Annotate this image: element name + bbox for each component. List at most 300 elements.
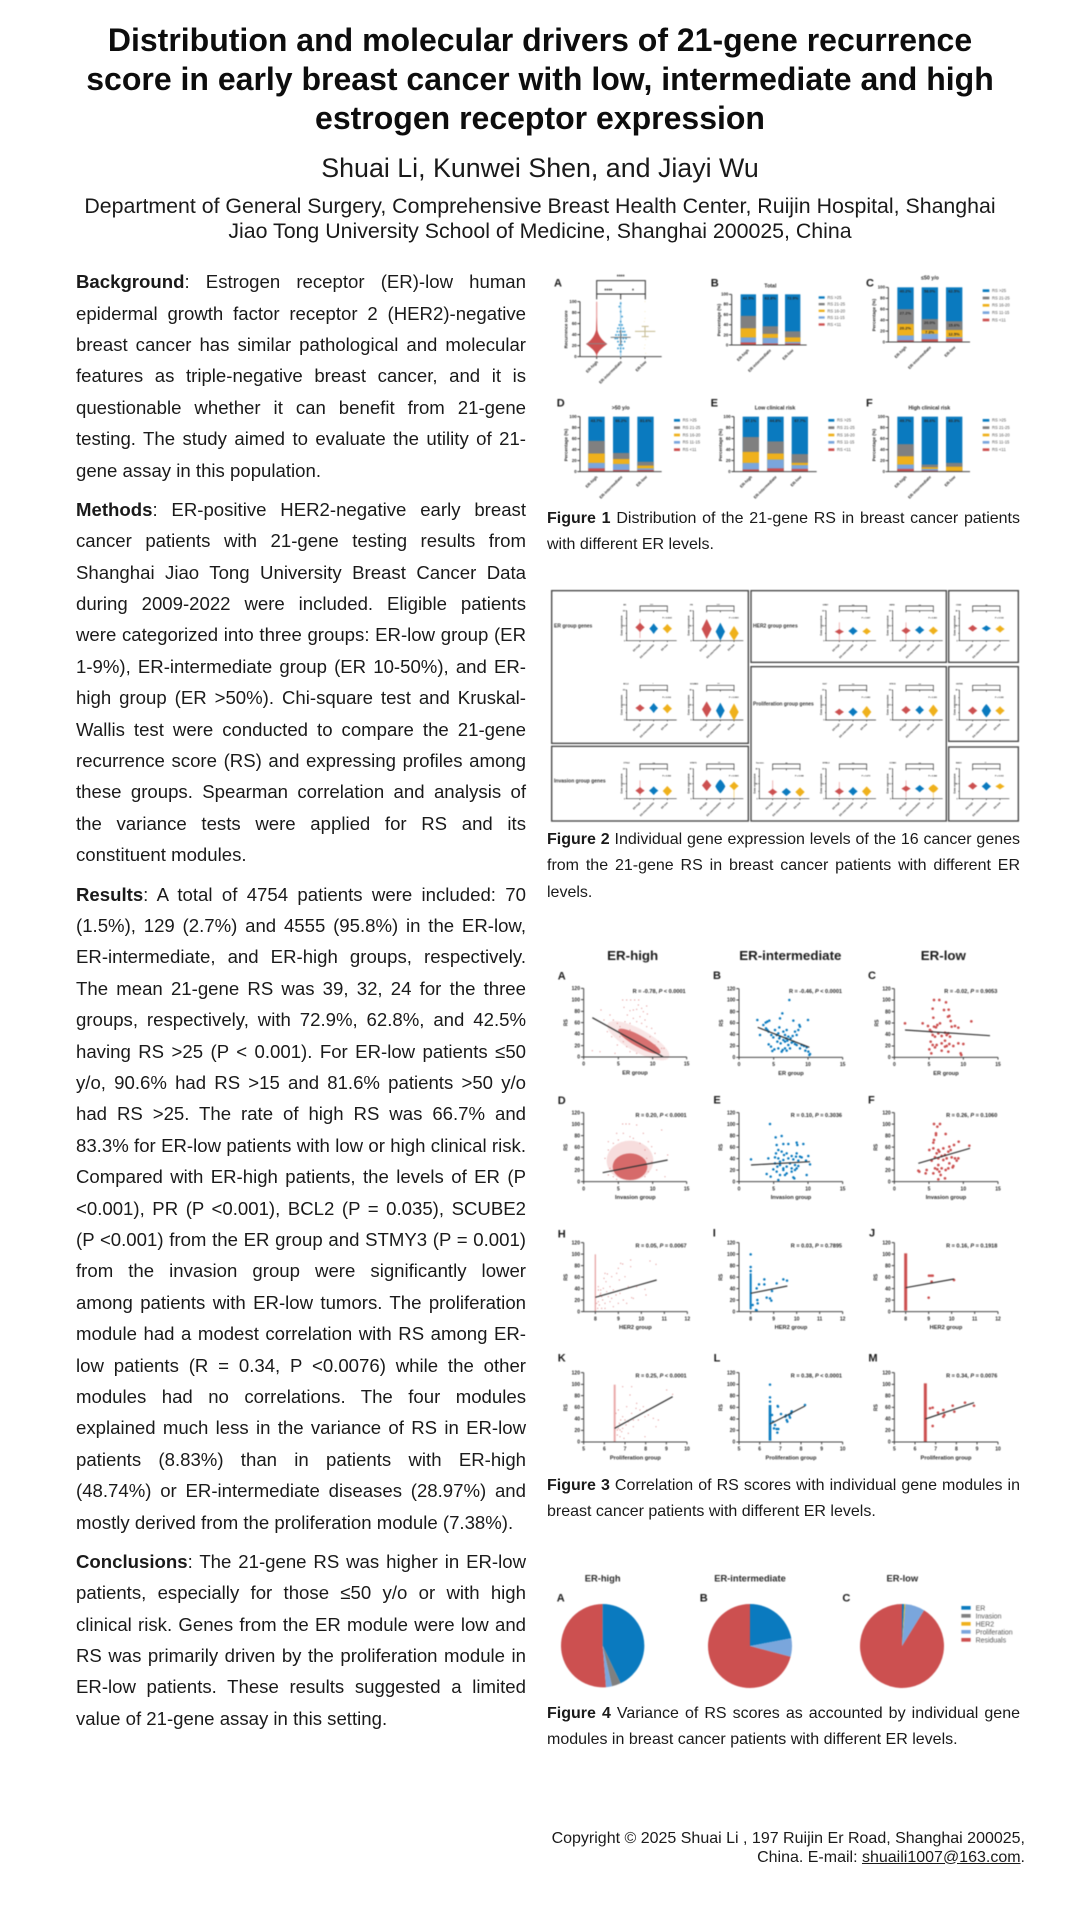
chart B: total stacked bars: 0 bbox=[726, 342, 729, 347]
violin plot: PR bbox=[687, 604, 743, 659]
violin plot: CD68: ns bbox=[985, 604, 989, 606]
scatter L: 60 bbox=[730, 1405, 736, 1411]
scatter H: 9 bbox=[617, 1316, 620, 1322]
scatter K bbox=[558, 1353, 690, 1461]
violin plot: HER2: Gene expression bbox=[887, 615, 890, 636]
chart B: total stacked bars: RS 21-25 bbox=[827, 302, 846, 307]
chart B: total stacked bars: Percentage (%) bbox=[716, 303, 721, 336]
text block: methods: constituent modules. bbox=[76, 844, 247, 865]
chart C: age 50 or younger stacked bars: 80 bbox=[880, 295, 886, 300]
text block: results: groups, respectively, with 72.9%, 62.8%, and 42.5% bbox=[76, 1009, 526, 1030]
chart D: age over 50 stacked bars: Percentage (%) bbox=[563, 428, 568, 461]
scatter E: RS bbox=[718, 1143, 724, 1151]
scatter E: 0 bbox=[738, 1186, 741, 1192]
violin plot: CD68: 20 bbox=[955, 610, 959, 612]
violin plot: STMY3: P < 0.0001 bbox=[729, 775, 740, 778]
text block: conclusions bbox=[76, 1551, 526, 1729]
chart F: high clinical risk stacked bars: 83.3% bbox=[948, 418, 960, 423]
chart D: age over 50 stacked bars: 20 bbox=[572, 458, 577, 463]
scatter H: 80 bbox=[574, 1263, 580, 1269]
text block: results: had RS >25. The rate of high RS was 66.7% and bbox=[76, 1103, 526, 1124]
scatter I: 8 bbox=[749, 1316, 752, 1322]
violin plot: CTSL2: ER-low bbox=[661, 802, 669, 810]
panel: BAG1 box bbox=[949, 747, 1018, 821]
chart A: recurrence score dot plot: A bbox=[554, 278, 562, 290]
violin plot: PR: Gene expression bbox=[687, 615, 690, 636]
violin plot: GSTM1 bbox=[953, 684, 1009, 739]
violin plot: HER2: ns bbox=[919, 604, 922, 606]
chart C: age 50 or younger stacked bars: 20.0% bbox=[924, 320, 936, 325]
caption: figure 3 bbox=[547, 1476, 1020, 1520]
violin plot: CD68: 10 bbox=[955, 625, 959, 627]
scatter J: 11 bbox=[972, 1316, 978, 1322]
chart A: recurrence score dot plot: ER-low bbox=[634, 359, 648, 373]
text block: background bbox=[76, 271, 526, 481]
scatter K: RS bbox=[563, 1404, 569, 1411]
chart B: total stacked bars: RS 11-15 bbox=[827, 315, 845, 320]
panel: invasion group genes box bbox=[552, 746, 748, 821]
text block: results: 83.3% for ER-low patients with low or high clinical risk. bbox=[76, 1135, 526, 1156]
scatter A: ER group bbox=[622, 1070, 648, 1076]
scatter C: 40 bbox=[885, 1032, 891, 1038]
chart D: age over 50 stacked bars bbox=[557, 398, 701, 500]
violin plot: STK15: ER-high bbox=[898, 723, 908, 732]
violin plot: SCUBE2: ER-high bbox=[699, 723, 708, 732]
caption: figure 1 bbox=[547, 510, 1020, 553]
chart A: recurrence score dot plot: ER-intermediate bbox=[598, 359, 624, 385]
chart B: total stacked bars: ER-intermediate bbox=[747, 347, 773, 373]
scatter A: 15 bbox=[684, 1062, 690, 1068]
chart E: low clinical risk stacked bars: 67.7% bbox=[794, 418, 806, 423]
violin plot: CD68: 0 bbox=[957, 640, 959, 642]
scatter F: 0 bbox=[893, 1186, 896, 1192]
violin plot: CCNB1 bbox=[887, 762, 943, 817]
scatter I: 10 bbox=[794, 1316, 800, 1322]
scatter D: 0 bbox=[577, 1179, 580, 1185]
chart B: total stacked bars: 80 bbox=[724, 302, 729, 307]
scatter F: 80 bbox=[885, 1133, 891, 1139]
chart C: age 50 or younger stacked bars: 12.5% bbox=[948, 331, 960, 336]
chart C: age 50 or younger stacked bars: 27.2% bbox=[900, 310, 911, 315]
chart F: high clinical risk stacked bars: RS <11 bbox=[992, 447, 1006, 452]
violin plot: STMY3: 20 bbox=[689, 768, 693, 770]
scatter K: 40 bbox=[574, 1417, 580, 1423]
chart C: age 50 or younger stacked bars: 0 bbox=[883, 339, 886, 344]
violin plot: STMY3: 0 bbox=[691, 798, 693, 800]
scatter L: 9 bbox=[820, 1447, 823, 1453]
caption: figure 3: breast cancer patients with different ER levels. bbox=[547, 1503, 876, 1520]
title bbox=[86, 22, 994, 136]
violin plot: ER: P < 0.0001 bbox=[662, 617, 673, 620]
scatter M: 6 bbox=[914, 1447, 917, 1453]
chart F: high clinical risk stacked bars: RS 16-20 bbox=[992, 432, 1010, 437]
scatter B: R = -0.46, P < 0.0001 bbox=[789, 989, 842, 995]
scatter M: 80 bbox=[885, 1393, 891, 1399]
text block: results: mostly derived from the proliferation module (7.38%). bbox=[76, 1512, 513, 1532]
chart D: age over 50 stacked bars: 40 bbox=[572, 447, 577, 452]
affiliation: Jiao Tong University School of Medicine, Shanghai 200025, China bbox=[228, 218, 852, 242]
title: estrogen receptor expression bbox=[315, 100, 765, 136]
text block: results: having RS >25 (P < 0.001). For ER-low patients ≤50 bbox=[76, 1041, 526, 1062]
text block: results: y/o, 90.6% had RS >15 and 81.6% patients >50 y/o bbox=[76, 1072, 526, 1093]
chart F: high clinical risk stacked bars: 40 bbox=[880, 447, 886, 452]
violin plot: CTSL2: ER-intermediate bbox=[639, 801, 655, 817]
scatter F: 40 bbox=[885, 1156, 891, 1162]
violin plot: GSTM1: ns bbox=[985, 684, 989, 686]
text block: methods: cancer patients with 21-gene testing results from bbox=[76, 530, 526, 551]
violin plot: STMY3: Gene expression bbox=[687, 773, 690, 794]
violin plot: STK15: Gene expression bbox=[887, 694, 890, 715]
text block: background: breast cancer has similar pathological and molecular bbox=[76, 334, 526, 355]
violin plot: SCUBE2: 0 bbox=[691, 720, 693, 722]
violin plot: PR: 20 bbox=[689, 610, 693, 612]
violin plot: ER: Gene expression bbox=[621, 615, 624, 636]
scatter C: 15 bbox=[995, 1062, 1001, 1068]
scatter H: 20 bbox=[574, 1298, 580, 1304]
pie chart A: ER-high: ER-high bbox=[585, 1574, 621, 1584]
text block: background: Background: Estrogen receptor (ER)-low human bbox=[76, 271, 526, 292]
scatter K: 6 bbox=[603, 1447, 606, 1453]
violin plot: BCL2: 20 bbox=[623, 690, 626, 692]
text block: background: questionable whether it can benefit from 21-gene bbox=[76, 397, 526, 418]
chart F: high clinical risk stacked bars: 0 bbox=[883, 469, 886, 474]
scatter E: 60 bbox=[730, 1145, 736, 1151]
violin plot: HER2: 20 bbox=[889, 610, 892, 612]
violin plot: ER: ER-low bbox=[661, 644, 669, 652]
scatter I: 120 bbox=[727, 1240, 736, 1246]
scatter J: 120 bbox=[882, 1240, 891, 1246]
chart E: low clinical risk stacked bars: RS >25 bbox=[837, 418, 852, 423]
text block: results: ER-intermediate, and ER-high groups, respectively. bbox=[76, 946, 526, 967]
scatter C: ER group bbox=[933, 1071, 959, 1077]
violin plot: GRB7: 10 bbox=[822, 625, 825, 627]
chart F: high clinical risk stacked bars: ER-high bbox=[893, 474, 908, 489]
pie chart C: ER-low: ER-low bbox=[887, 1574, 919, 1584]
scatter A: A bbox=[558, 971, 566, 983]
violin plot: MYBL2: ER-low bbox=[860, 802, 868, 810]
chart D: age over 50 stacked bars: 60 bbox=[572, 436, 577, 441]
scatter A: 80 bbox=[574, 1009, 580, 1015]
text block: results bbox=[76, 884, 526, 1533]
scatter E: 10 bbox=[805, 1186, 811, 1192]
violin plot: HER2: ER-high bbox=[898, 643, 908, 652]
chart D: age over 50 stacked bars: RS 21-25 bbox=[683, 425, 701, 430]
scatter D: 40 bbox=[574, 1156, 580, 1162]
figure 1: distribution charts bbox=[554, 274, 1010, 500]
violin plot: Ki67: ER-intermediate bbox=[839, 722, 855, 739]
violin plot: SCUBE2: ER-low bbox=[727, 723, 735, 731]
chart A: recurrence score dot plot: **** bbox=[604, 289, 612, 295]
scatter M: 5 bbox=[893, 1447, 896, 1453]
violin plot: BAG1: ER-low bbox=[993, 802, 1001, 810]
chart B: total stacked bars: B bbox=[711, 278, 719, 290]
chart C: age 50 or younger stacked bars: ER-intermediate bbox=[907, 344, 933, 370]
text block: results: modules had no correlations. The four modules bbox=[76, 1386, 526, 1407]
violin plot: CCNB1: ER-low bbox=[927, 802, 935, 810]
violin plot: Ki67 bbox=[820, 684, 876, 739]
scatter K: Proliferation group bbox=[610, 1455, 661, 1461]
violin plot: GRB7: ER-high bbox=[832, 643, 841, 652]
scatter D: Invasion group bbox=[615, 1195, 656, 1201]
violin plot: GSTM1: GSTM1 bbox=[956, 684, 964, 686]
violin plot: CTSL2 bbox=[621, 762, 677, 817]
violin plot: BAG1: 20 bbox=[955, 768, 959, 770]
scatter A: 5 bbox=[617, 1062, 620, 1068]
scatter M bbox=[868, 1353, 1001, 1461]
scatter D: 5 bbox=[617, 1186, 620, 1192]
violin plot: MYBL2: 10 bbox=[822, 783, 825, 785]
pie chart B: ER-intermediate: ER-intermediate bbox=[714, 1574, 786, 1584]
chart F: high clinical risk stacked bars: F bbox=[866, 398, 873, 410]
chart E: low clinical risk stacked bars: 20 bbox=[726, 458, 731, 463]
violin plot: CD68: CD68 bbox=[956, 604, 962, 606]
violin plot: SCUBE2: ER-intermediate bbox=[706, 722, 722, 739]
scatter E: 100 bbox=[727, 1122, 736, 1128]
chart C: age 50 or younger stacked bars: ≤50 y/o bbox=[921, 276, 939, 282]
scatter C: 120 bbox=[882, 986, 891, 992]
scatter C: 20 bbox=[885, 1044, 891, 1050]
chart F: high clinical risk stacked bars: 86.6% bbox=[924, 418, 936, 423]
scatter J: 100 bbox=[882, 1252, 891, 1258]
chart D: age over 50 stacked bars: RS 16-20 bbox=[683, 432, 701, 437]
scatter F: 60 bbox=[885, 1145, 891, 1151]
scatter J bbox=[869, 1228, 1001, 1331]
scatter K: 20 bbox=[574, 1428, 580, 1434]
violin plot: BAG1: 0 bbox=[957, 798, 959, 800]
violin plot: PR: PR bbox=[690, 604, 693, 606]
scatter C: RS bbox=[874, 1019, 880, 1026]
chart E: low clinical risk stacked bars: ER-low bbox=[789, 474, 803, 488]
violin plot: GRB7: ER-intermediate bbox=[839, 643, 855, 659]
scatter E: 0 bbox=[733, 1179, 736, 1185]
violin plot: ER: ER-intermediate bbox=[639, 643, 655, 659]
scatter M: Proliferation group bbox=[921, 1455, 972, 1461]
chart D: age over 50 stacked bars: RS 11-15 bbox=[683, 440, 701, 445]
violin plot: BCL2: Gene expression bbox=[621, 694, 624, 715]
text block: conclusions: ER-low patients. These results suggested a limited bbox=[76, 1676, 526, 1697]
title: Distribution and molecular drivers of 21-gene recurrence bbox=[108, 22, 972, 58]
scatter J: R = 0.16, P = 0.1918 bbox=[946, 1243, 997, 1249]
scatter M: RS bbox=[873, 1404, 879, 1411]
violin plot: CTSL2: ns bbox=[653, 762, 656, 764]
text block: results: <0.001), PR (P <0.001), BCL2 (P = 0.035), SCUBE2 bbox=[76, 1198, 526, 1219]
chart E: low clinical risk stacked bars: 100 bbox=[723, 414, 731, 419]
chart E: low clinical risk stacked bars: ER-intermediate bbox=[752, 474, 778, 500]
scatter K: 9 bbox=[665, 1447, 668, 1453]
violin plot: SCUBE2: 10 bbox=[689, 705, 693, 707]
scatter E: E bbox=[713, 1094, 721, 1106]
chart F: high clinical risk stacked bars: 20 bbox=[880, 458, 886, 463]
scatter H bbox=[558, 1228, 690, 1331]
scatter K: 120 bbox=[572, 1370, 580, 1376]
violin plot: HER2: 10 bbox=[889, 625, 892, 627]
violin plot: Ki67: Ki67 bbox=[823, 684, 828, 686]
scatter A: 0 bbox=[582, 1062, 585, 1068]
chart B: total stacked bars: 40 bbox=[724, 322, 729, 327]
caption: figure 1: with different ER levels. bbox=[547, 536, 714, 553]
scatter E bbox=[713, 1094, 846, 1201]
violin plot: CCNB1: ns bbox=[919, 762, 922, 764]
chart E: low clinical risk stacked bars: RS 16-20 bbox=[837, 432, 855, 437]
chart F: high clinical risk stacked bars: Percentage (%) bbox=[872, 428, 877, 461]
scatter C: C bbox=[868, 970, 876, 982]
scatter H: 12 bbox=[685, 1316, 690, 1322]
chart A: recurrence score dot plot: 100 bbox=[569, 299, 577, 304]
violin plot: STMY3: *** bbox=[718, 762, 721, 764]
legend: ER bbox=[976, 1605, 985, 1612]
pie chart B: ER-intermediate: B bbox=[700, 1592, 708, 1604]
panel: invasion group genes box: Invasion group genes bbox=[554, 779, 606, 785]
scatter E: 80 bbox=[730, 1133, 736, 1139]
violin plot: STK15: ER-intermediate bbox=[905, 722, 921, 739]
violin plot: ER: 0 bbox=[624, 640, 626, 642]
scatter D: 20 bbox=[574, 1168, 580, 1174]
scatter H: 0 bbox=[577, 1309, 580, 1315]
violin plot: CTSL2: 20 bbox=[623, 768, 626, 770]
violin plot: ER bbox=[621, 604, 677, 659]
chart C: age 50 or younger stacked bars: Percentage (%) bbox=[872, 298, 877, 331]
text block: conclusions: Conclusions: The 21-gene RS was higher in ER-low bbox=[76, 1551, 526, 1572]
chart E: low clinical risk stacked bars: 40 bbox=[726, 447, 731, 452]
chart D: age over 50 stacked bars: D bbox=[557, 398, 565, 410]
pie chart C: ER-low bbox=[842, 1574, 944, 1688]
violin plot: STK15 bbox=[887, 684, 943, 739]
chart D: age over 50 stacked bars: RS <11 bbox=[683, 447, 697, 452]
scatter A: 60 bbox=[574, 1020, 580, 1026]
chart C: age 50 or younger stacked bars: 60 bbox=[880, 306, 886, 311]
text block: results: from the invasion group were significantly lower bbox=[76, 1260, 526, 1281]
chart B: total stacked bars: Total bbox=[764, 283, 777, 289]
chart D: age over 50 stacked bars: ER-low bbox=[635, 474, 649, 488]
scatter H: 40 bbox=[574, 1286, 580, 1292]
violin plot: GRB7: ER-low bbox=[860, 644, 868, 652]
text block: results: (1.5%), 129 (2.7%) and 4555 (95.8%) in the ER-low, bbox=[76, 915, 526, 936]
chart E: low clinical risk stacked bars: 37.1% bbox=[745, 418, 757, 423]
scatter I: HER2 group bbox=[775, 1325, 808, 1331]
violin plot: PR: ER-intermediate bbox=[706, 643, 722, 659]
chart A: recurrence score dot plot: * bbox=[632, 289, 634, 295]
scatter J: RS bbox=[873, 1273, 879, 1281]
violin plot: STMY3: ER-high bbox=[699, 801, 708, 810]
violin plot: STMY3: ER-low bbox=[727, 802, 735, 810]
legend: Proliferation bbox=[976, 1629, 1013, 1636]
text block: background: testing. The study aimed to evaluate the utility of 21- bbox=[76, 428, 526, 449]
chart C: age 50 or younger stacked bars: RS 16-20 bbox=[992, 303, 1010, 308]
chart C: age 50 or younger stacked bars: 62.5% bbox=[948, 288, 960, 293]
scatter D: 60 bbox=[574, 1145, 580, 1151]
chart C: age 50 or younger stacked bars: ER-high bbox=[893, 344, 908, 359]
violin plot: CTSL2: 0 bbox=[624, 798, 626, 800]
scatter F: F bbox=[868, 1094, 875, 1106]
text block: results: Compared with ER-high patients, the levels of ER (P bbox=[76, 1166, 526, 1187]
violin plot: MYBL2: Gene expression bbox=[820, 773, 823, 794]
violin plot: STK15: 20 bbox=[889, 690, 892, 692]
scatter F: 15 bbox=[995, 1186, 1001, 1192]
scatter K: 10 bbox=[684, 1447, 690, 1453]
scatter F: 10 bbox=[961, 1186, 966, 1192]
violin plot: GSTM1: Gene expression bbox=[953, 694, 956, 715]
figure 2: gene expression violin panels bbox=[550, 589, 1020, 822]
chart E: low clinical risk stacked bars: RS 11-15 bbox=[837, 440, 855, 445]
scatter B: 100 bbox=[727, 998, 736, 1004]
chart C: age 50 or younger stacked bars: C bbox=[866, 278, 874, 290]
violin plot: HER2: ER-intermediate bbox=[905, 643, 921, 659]
affiliation: Department of General Surgery, Comprehensive Breast Health Center, Ruijin Hospital, Shanghai bbox=[84, 194, 996, 218]
scatter K: 0 bbox=[577, 1440, 580, 1446]
chart D: age over 50 stacked bars: 43.7% bbox=[591, 418, 602, 423]
violin plot: BCL2 bbox=[621, 684, 677, 739]
violin plot: STK15: 10 bbox=[889, 705, 892, 707]
chart F: high clinical risk stacked bars bbox=[866, 398, 1010, 500]
scatter D: D bbox=[558, 1095, 566, 1107]
scatter L: 40 bbox=[730, 1417, 736, 1423]
scatter J: 80 bbox=[885, 1263, 891, 1269]
chart F: high clinical risk stacked bars: 100 bbox=[878, 414, 886, 419]
chart B: total stacked bars: RS <11 bbox=[827, 322, 842, 327]
violin plot: Survivin: ER-intermediate bbox=[772, 801, 788, 817]
text block: methods: Shanghai Jiao Tong University Breast Cancer Data bbox=[76, 562, 526, 583]
legend: Residuals bbox=[976, 1637, 1007, 1644]
scatter L: 6 bbox=[758, 1447, 761, 1453]
scatter C: 60 bbox=[885, 1021, 891, 1027]
scatter B: 40 bbox=[730, 1032, 736, 1038]
scatter E: Invasion group bbox=[771, 1195, 812, 1201]
chart C: age 50 or younger stacked bars: 58.0% bbox=[924, 288, 936, 293]
scatter J: 0 bbox=[888, 1309, 891, 1315]
violin plot: GSTM1: ER-low bbox=[993, 723, 1001, 731]
scatter C: R = -0.02, P = 0.9053 bbox=[944, 989, 997, 995]
violin plot: Survivin: Survivin bbox=[756, 762, 765, 764]
violin plot: Ki67: ER-low bbox=[860, 723, 868, 731]
text block: methods: recurrence score (RS) and expressing profiles among bbox=[76, 750, 526, 771]
violin plot: CTSL2: 10 bbox=[623, 783, 626, 785]
chart B: total stacked bars: 20 bbox=[724, 332, 729, 337]
scatter I: 40 bbox=[730, 1286, 736, 1292]
chart A: recurrence score dot plot: Recurrence score bbox=[563, 310, 568, 348]
scatter C: 5 bbox=[928, 1062, 931, 1068]
violin plot: BCL2: ER-low bbox=[661, 723, 669, 731]
violin plot: Ki67: Gene expression bbox=[820, 694, 823, 715]
chart B: total stacked bars: ER-high bbox=[736, 347, 750, 362]
scatter B: 0 bbox=[733, 1055, 736, 1061]
violin plot: CTSL2: ER-high bbox=[632, 801, 642, 810]
violin plot: CD68: ER-high bbox=[965, 643, 974, 652]
chart D: age over 50 stacked bars: 81.6% bbox=[640, 418, 652, 423]
chart C: age 50 or younger stacked bars: RS 21-25 bbox=[992, 295, 1010, 300]
chart E: low clinical risk stacked bars: 60 bbox=[726, 436, 731, 441]
text block: conclusions: RS was primarily driven by the proliferation module in bbox=[76, 1645, 526, 1666]
caption: figure 1: Figure 1 Distribution of the 21-gene RS in breast cancer patients bbox=[547, 510, 1020, 526]
violin plot: MYBL2: P = 0.273 bbox=[862, 776, 871, 778]
text block: results: patients (8.83%) than in patients with ER-high bbox=[76, 1449, 526, 1470]
scatter M: 100 bbox=[882, 1382, 891, 1388]
chart B: total stacked bars: 60 bbox=[724, 312, 729, 317]
text block: methods: were categorized into three groups: ER-low group (ER bbox=[76, 624, 526, 645]
violin plot: STMY3: ER-intermediate bbox=[706, 801, 722, 817]
violin plot: PR: 0 bbox=[691, 640, 693, 642]
chart A: recurrence score dot plot bbox=[554, 275, 662, 385]
violin plot: ER: ER-high bbox=[632, 643, 642, 652]
violin plot: ER: 20 bbox=[623, 610, 626, 612]
chart E: low clinical risk stacked bars: 80 bbox=[726, 425, 731, 430]
scatter D bbox=[558, 1095, 690, 1201]
scatter D: R = 0.20, P < 0.0001 bbox=[635, 1113, 687, 1119]
legend: Invasion bbox=[976, 1613, 1002, 1620]
text block: results: explained much less in the variance of RS in ER-low bbox=[76, 1417, 526, 1438]
violin plot: BCL2: ER-high bbox=[632, 723, 642, 732]
panel: ER group genes box bbox=[552, 591, 748, 743]
text block: conclusions: clinical risk. Genes from the ER module were low and bbox=[76, 1614, 526, 1635]
